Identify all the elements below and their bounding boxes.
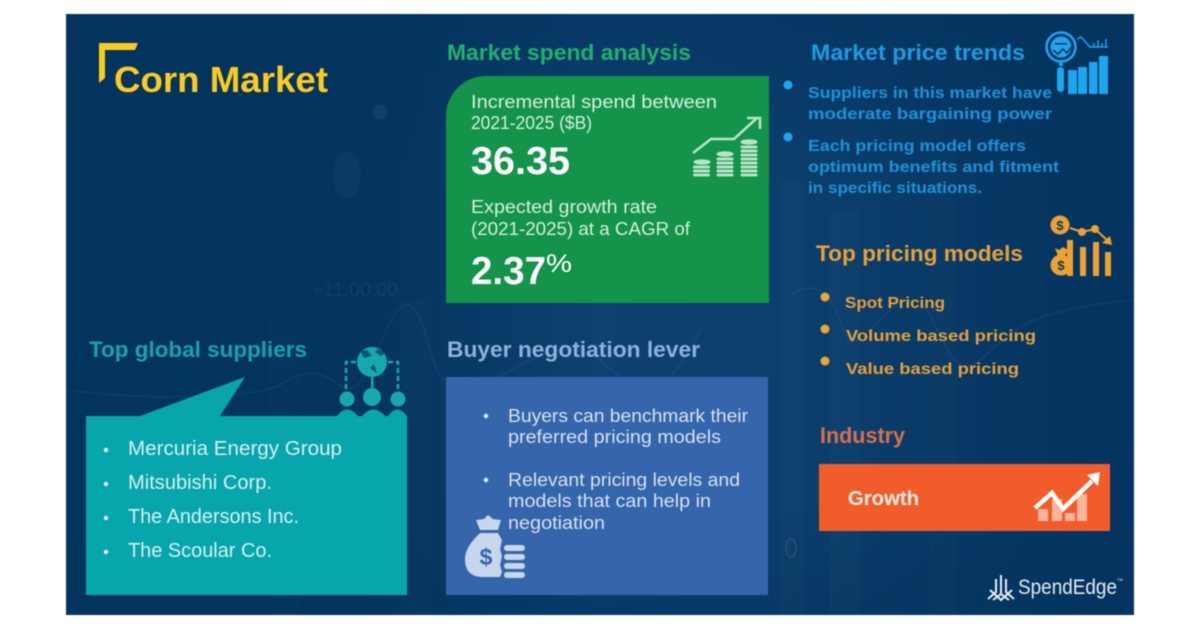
lever list: models that can help in [508, 491, 711, 511]
supplier list [104, 438, 342, 562]
lever list: negotiation [508, 513, 605, 533]
incremental spend value: 36.35 [471, 140, 570, 183]
icon: money bag and falling bars [1050, 216, 1112, 276]
heading: Market price trends: Market price trends [811, 40, 1025, 65]
supplier list: The Scoular Co. [128, 540, 272, 562]
logo text: SpendEdge [1018, 576, 1117, 599]
growth rate value: 2.37 [471, 250, 546, 293]
lever list: preferred pricing models [508, 427, 721, 447]
list: top pricing models: Value based pricing [846, 361, 1019, 378]
supplier list: Mitsubishi Corp. [128, 472, 272, 494]
icon: magnifier and bars [1046, 32, 1108, 94]
logo: SpendEdge [988, 575, 1123, 600]
incremental spend label: Incremental spend between [471, 92, 717, 112]
panel: buyer negotiation lever [446, 377, 768, 595]
heading: Industry: Industry [820, 423, 906, 448]
logo mark [988, 575, 1014, 600]
heading: Buyer negotiation lever: Buyer negotiation lever [447, 337, 700, 362]
incremental spend label: 2021-2025 ($B) [471, 113, 592, 133]
list: market price trends: optimum benefits and fitment [808, 159, 1060, 176]
panel: industry growth [819, 464, 1110, 531]
growth rate label: Expected growth rate [471, 197, 657, 217]
list: market price trends: in specific situations. [808, 180, 982, 197]
list: market price trends [784, 80, 1060, 197]
heading: Top pricing models: Top pricing models [816, 241, 1023, 266]
growth rate label: (2021-2025) at a CAGR of [471, 219, 691, 239]
title text: Corn Market [114, 59, 328, 100]
icon: money bag and coins [465, 515, 525, 578]
list: top pricing models [820, 292, 1036, 378]
list: market price trends: moderate bargaining power [808, 106, 1052, 123]
heading: Market spend analysis: Market spend analysis [447, 40, 691, 65]
icon: globe and network [340, 347, 406, 406]
logo: SpendEdge: TM [1117, 577, 1123, 582]
title: Corn Market [99, 43, 328, 100]
supplier list: Mercuria Energy Group [128, 438, 342, 460]
icon: money bag and falling bars: $ [1057, 258, 1065, 273]
lever list [484, 406, 748, 533]
growth label: Growth [848, 488, 919, 510]
icon: money bag and falling bars: $ [1056, 218, 1064, 233]
list: market price trends: Suppliers in this market have [808, 85, 1052, 102]
icon: rising coins [693, 118, 760, 176]
list: market price trends: Each pricing model offers [808, 138, 1026, 155]
list: top pricing models: Volume based pricing [846, 328, 1036, 345]
lever list: Relevant pricing levels and [508, 470, 740, 490]
lever list: Buyers can benchmark their [508, 406, 748, 426]
panel: market spend [446, 76, 769, 303]
background panel: +11,00.00 [312, 280, 398, 301]
growth rate value: % [546, 250, 572, 278]
heading: Top global suppliers: Top global suppliers [89, 337, 307, 362]
icon: money bag and coins: $ [480, 544, 493, 570]
supplier list: The Andersons Inc. [128, 506, 299, 528]
panel: top global suppliers [86, 377, 407, 595]
list: top pricing models: Spot Pricing [845, 295, 945, 312]
title bracket [99, 43, 138, 83]
icon: growth arrow and bars [1035, 472, 1100, 521]
